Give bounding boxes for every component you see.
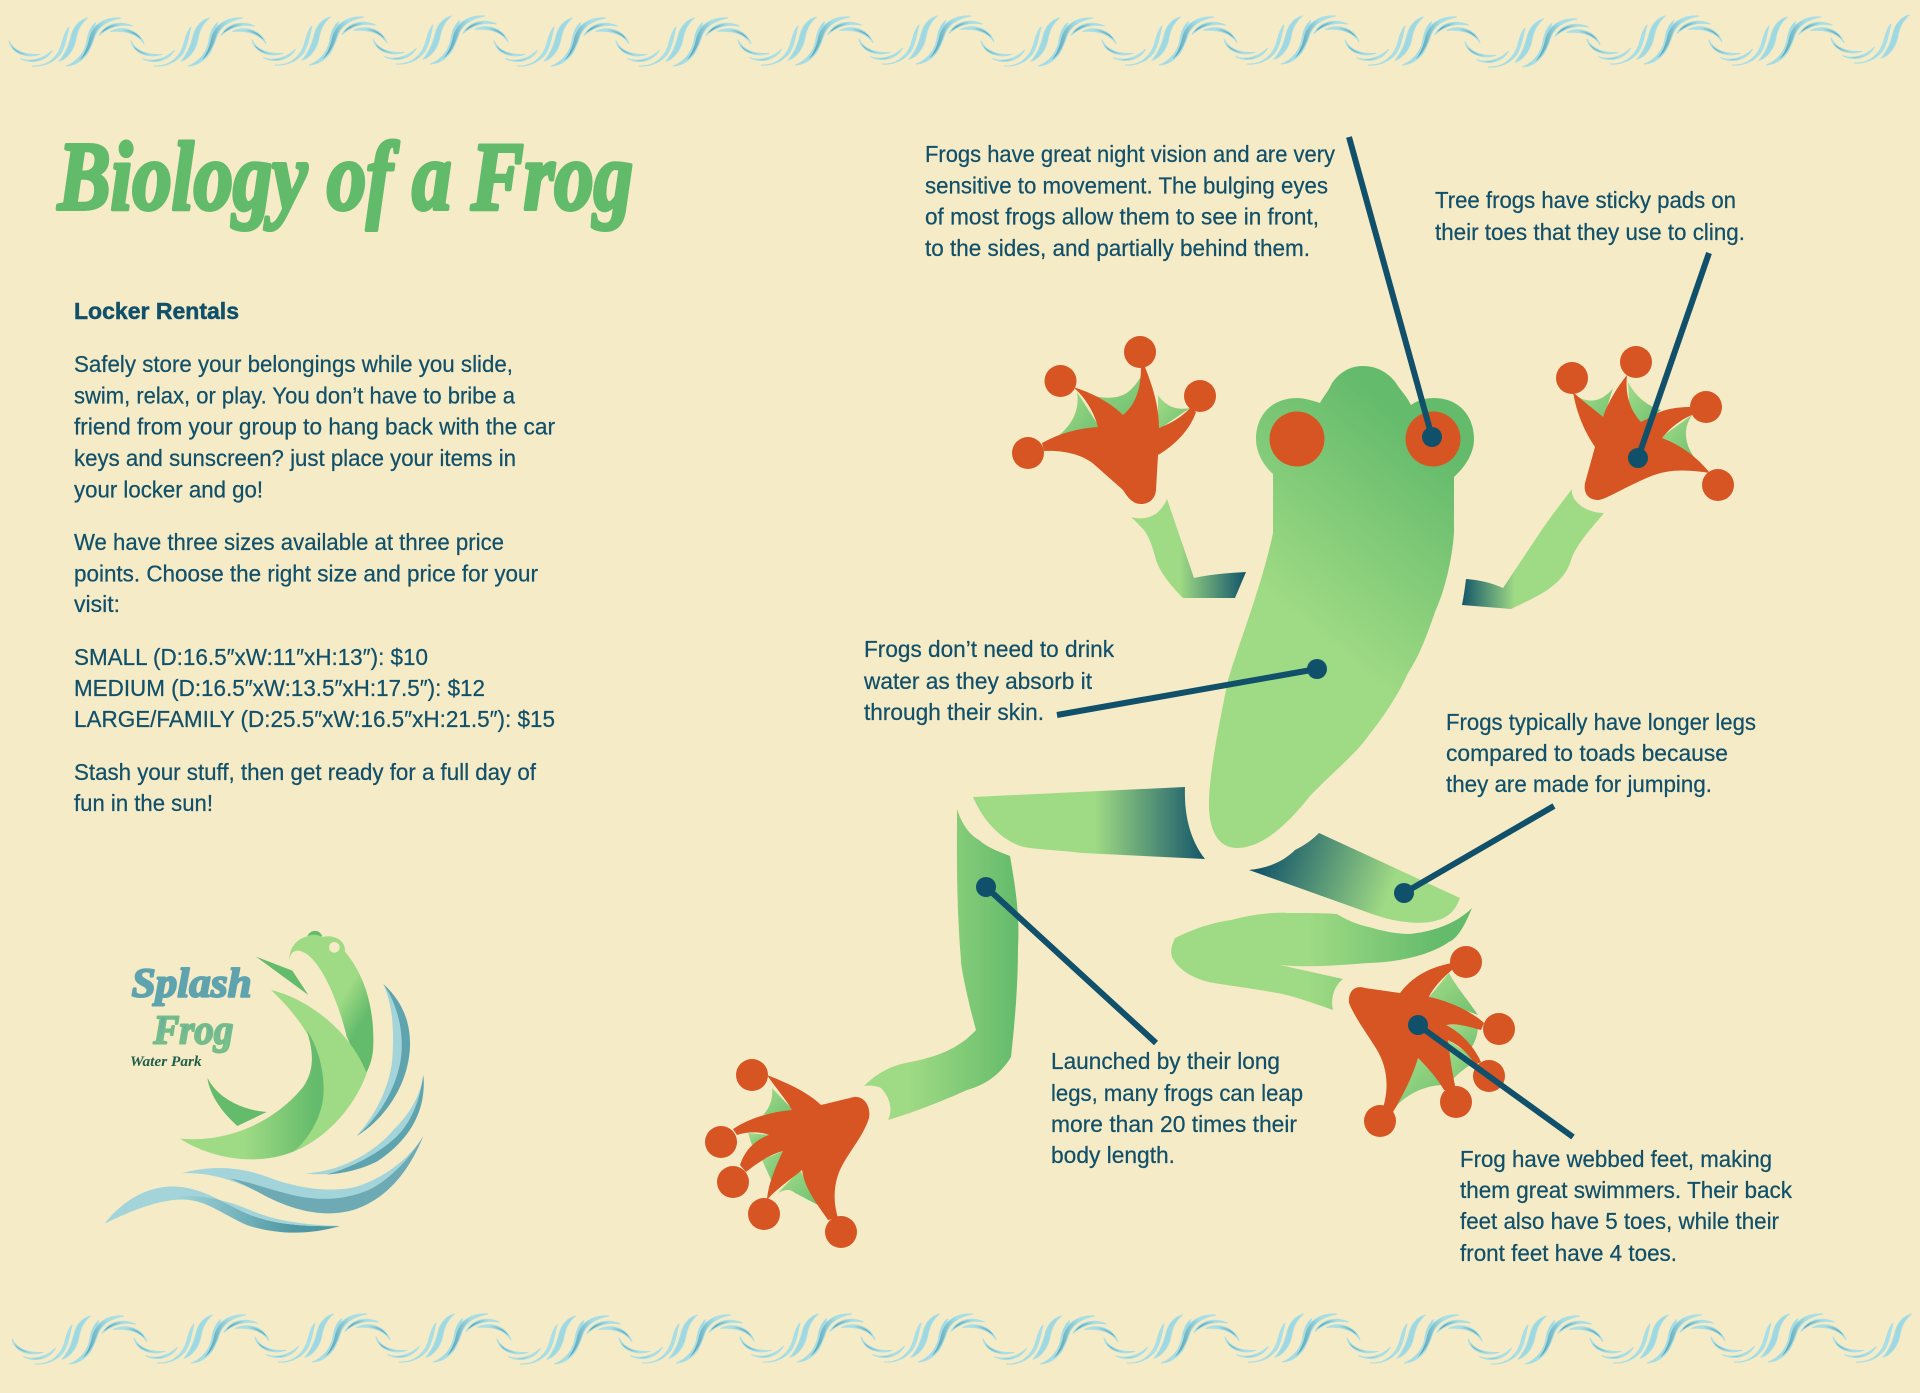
callout: absorb water: through their skin. xyxy=(864,699,1044,725)
callout: absorb water: water as they absorb it xyxy=(863,668,1092,694)
logo wordmark xyxy=(130,961,252,1070)
text block: locker rentals: swim, relax, or play. You don’t have to bribe a xyxy=(74,382,516,408)
callout: leap length: more than 20 times their xyxy=(1051,1111,1297,1137)
logo frog neck and head xyxy=(289,931,373,1075)
text block: locker rentals: SMALL (D:16.5″xW:11″xH:13″): $10 xyxy=(74,644,428,670)
callout: night vision xyxy=(925,137,1442,447)
bottom right foot xyxy=(1349,946,1515,1137)
callout: night vision: to the sides, and partially behind them. xyxy=(925,235,1310,261)
text block: locker rentals: Stash your stuff, then get ready for a full day of xyxy=(74,759,536,785)
text block: locker rentals xyxy=(74,298,555,816)
callout: leap length: body length. xyxy=(1051,1142,1175,1168)
top wave border xyxy=(9,15,1909,67)
callout: longer legs: they are made for jumping. xyxy=(1446,771,1712,797)
left thigh xyxy=(973,787,1205,859)
callout: webbed feet: front feet have 4 toes. xyxy=(1460,1240,1677,1266)
text block: locker rentals: We have three sizes available at three price xyxy=(74,529,504,555)
callout: webbed feet xyxy=(1408,1015,1792,1266)
logo wordmark: Splash xyxy=(132,961,252,1007)
text block: locker rentals: points. Choose the right size and price for your xyxy=(74,560,538,586)
title: Biology of a Frog xyxy=(57,123,633,231)
frog illustration xyxy=(705,336,1734,1248)
logo frog limbs and body xyxy=(180,957,367,1159)
callout: night vision: Frogs have great night vision and are very xyxy=(925,141,1335,167)
text block: locker rentals: LARGE/FAMILY (D:25.5″xW:16.5″xH:21.5″): $15 xyxy=(74,706,555,732)
text block: locker rentals: friend from your group to hang back with the car xyxy=(74,414,555,440)
logo wordmark: Water Park xyxy=(130,1054,202,1070)
bottom left foot xyxy=(705,1059,869,1248)
text block: locker rentals: Locker Rentals xyxy=(74,298,239,324)
eyes xyxy=(1270,412,1460,466)
callout: absorb water xyxy=(863,636,1327,725)
text block: locker rentals: your locker and go! xyxy=(74,476,263,502)
callout: night vision: of most frogs allow them to see in front, xyxy=(925,204,1319,230)
right shin xyxy=(1171,908,1472,1010)
callout: sticky pads: their toes that they use to cling. xyxy=(1435,219,1745,245)
callout: leap length: Launched by their long xyxy=(1051,1048,1280,1074)
callout: longer legs xyxy=(1394,709,1756,903)
left arm xyxy=(1131,499,1246,598)
text block: locker rentals: MEDIUM (D:16.5″xW:13.5″xH:17.5″): $12 xyxy=(74,675,485,701)
right thigh xyxy=(1249,833,1460,923)
logo water waves xyxy=(105,984,424,1233)
callout: webbed feet: them great swimmers. Their back xyxy=(1460,1177,1792,1203)
left lower leg xyxy=(864,809,1018,1120)
frog body and head xyxy=(1209,366,1474,848)
callout: webbed feet: Frog have webbed feet, making xyxy=(1460,1146,1772,1172)
callout: night vision: sensitive to movement. The bulging eyes xyxy=(925,172,1328,198)
bottom wave border xyxy=(12,1314,1911,1364)
callout: leap length xyxy=(976,877,1303,1168)
logo wordmark: Frog xyxy=(152,1007,233,1053)
callout: sticky pads xyxy=(1435,187,1745,468)
text block: locker rentals: visit: xyxy=(74,591,120,617)
callout: webbed feet: feet also have 5 toes, while their xyxy=(1460,1208,1779,1234)
callout: longer legs: compared to toads because xyxy=(1446,740,1728,766)
callout: longer legs: Frogs typically have longer legs xyxy=(1446,709,1756,735)
callout: sticky pads: Tree frogs have sticky pads on xyxy=(1435,187,1736,213)
text block: locker rentals: keys and sunscreen? just place your items in xyxy=(74,445,516,471)
top right hand xyxy=(1556,346,1734,501)
callout: absorb water: Frogs don’t need to drink xyxy=(864,636,1114,662)
top left hand xyxy=(1012,336,1216,504)
callout: leap length: legs, many frogs can leap xyxy=(1051,1080,1303,1106)
text block: locker rentals: Safely store your belongings while you slide, xyxy=(74,351,513,377)
text block: locker rentals: fun in the sun! xyxy=(74,790,213,816)
right arm xyxy=(1462,489,1604,609)
logo: Splash Frog Water Park xyxy=(105,931,424,1233)
